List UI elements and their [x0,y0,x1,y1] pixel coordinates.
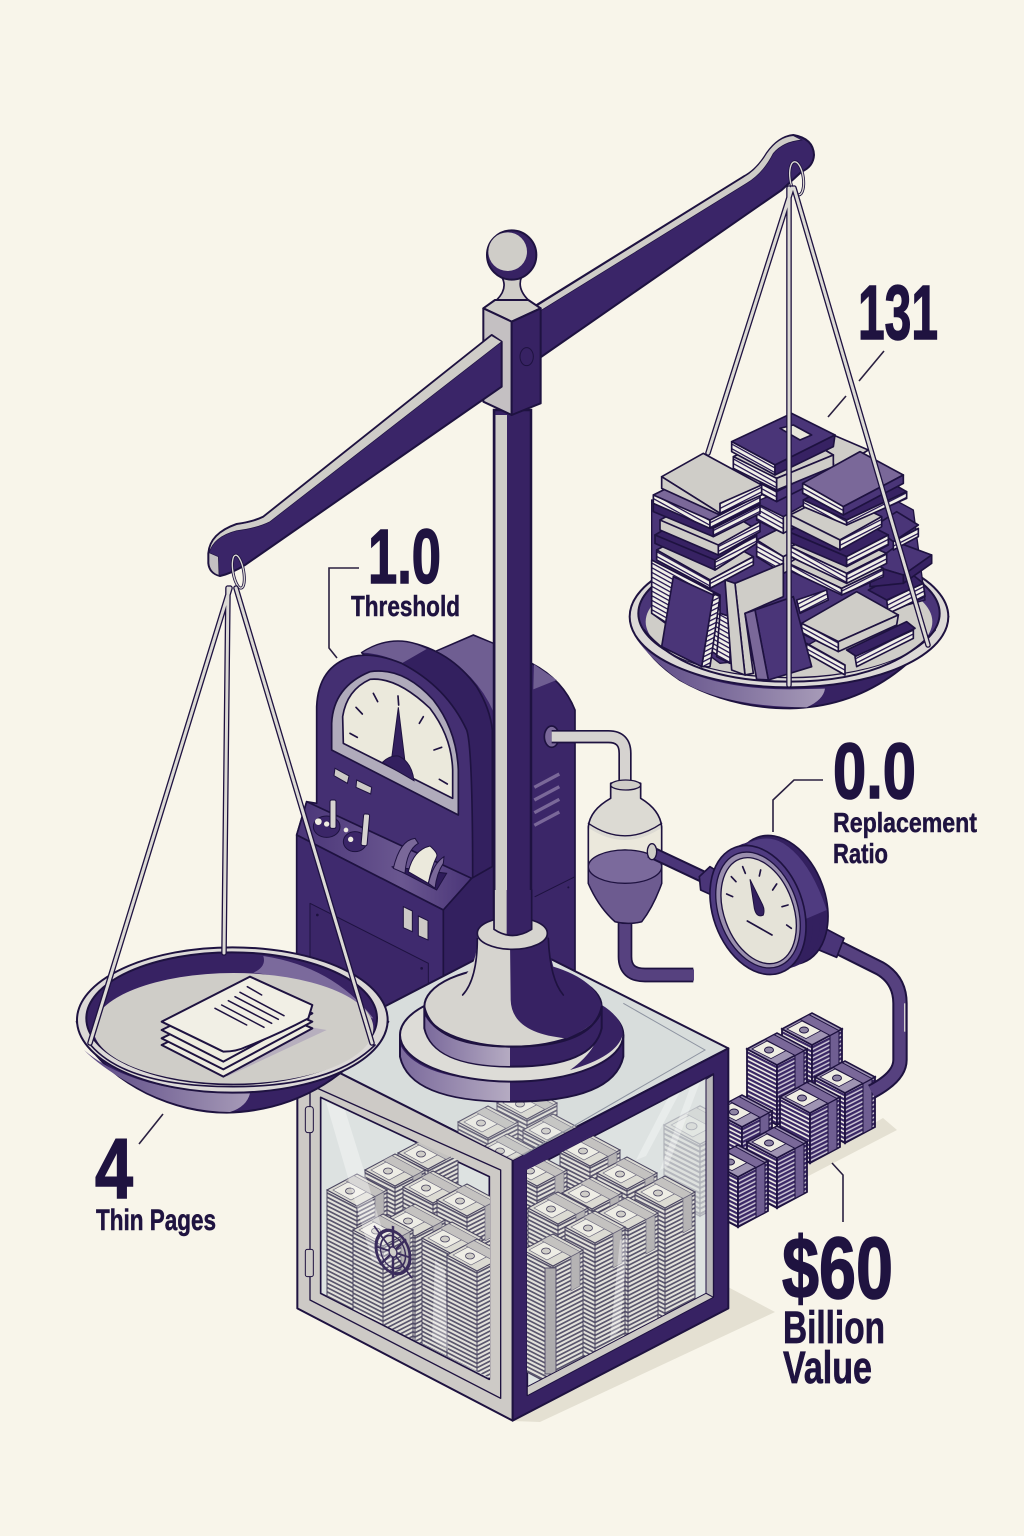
right beam arm [537,135,814,360]
left rim [77,947,388,1093]
gauge ticks [727,867,791,935]
book pile backing [652,467,925,663]
meter machine [297,635,575,1030]
ball [487,230,536,280]
door rivets [316,886,569,970]
right inner frame band [706,1075,713,1297]
upper hinge [305,1107,313,1133]
ball highlight [488,232,527,271]
outlet knob [544,726,559,747]
beam body [537,135,814,360]
base flare shadow dark [510,937,602,1038]
top edge band [523,1003,705,1155]
left beam top strip [209,336,502,553]
stat: 0.0 Replacement Ratio: Replacement [833,807,977,838]
gauge outlet pipe fill [830,943,900,1092]
flask neck ring [611,780,641,790]
arch side rim [362,641,492,963]
upper pipe outline [552,737,625,792]
left beam body [208,335,502,576]
money seen through top [457,1100,578,1160]
cast shadows under cube and money [513,1118,897,1422]
lower disc rim light side [401,1047,510,1101]
pan bowl [630,617,948,708]
paper stack [162,977,312,1077]
flask lower glass [589,828,661,867]
scale base on vault [400,890,623,1102]
gauge drum highlight [747,838,827,920]
flask liquid [588,850,662,923]
upper disc rim [424,1007,602,1067]
pan chains left [90,588,372,1043]
glass reflections [326,1082,700,1350]
dial frame [332,671,458,815]
lower disc rim [400,1035,623,1102]
stat: $60 Billion Value: Billion [783,1302,885,1353]
ball neck [497,277,528,300]
left pan paper shadow [227,1027,327,1077]
money stacks beside vault [708,1013,875,1227]
console lower front [297,835,443,1030]
lower hinge [305,1249,313,1277]
head top [483,300,541,322]
stat: 4 Thin Pages: Thin Pages [96,1204,216,1237]
upper disc front outline [424,1007,602,1047]
shaft bottom outline [494,890,532,935]
console top [297,802,472,910]
outlet connector [812,927,844,957]
flare left line [463,938,477,995]
stat: 4 Thin Pages: 4 [95,1122,133,1217]
left frame outline [310,1085,501,1398]
gauge bezel [693,832,823,988]
far right books [807,435,932,613]
toggle switches [313,800,370,852]
column head, ball and left beam [208,230,541,589]
left ring [230,554,246,589]
stat: 131: 131 [858,270,938,356]
left face frame [297,1052,513,1421]
pan chains right [708,188,928,685]
head left face [483,308,512,415]
gauge needle [750,879,764,916]
left beam end facet [209,553,219,575]
lower disc dark crescent [570,993,623,1070]
paper roll slot [392,838,447,890]
rear block [435,635,575,980]
upright gray book [725,563,783,675]
dial window [343,679,453,798]
right face frame [513,1048,728,1421]
stat: 0.0 Replacement Ratio [833,726,977,869]
console small windows [403,907,428,940]
shaft bottom fill [494,890,532,935]
stat: $60 Billion Value: Value [783,1342,872,1393]
money stacks right pane [527,1105,706,1380]
access door [310,903,428,1030]
console lower side [443,865,495,1030]
side vents [534,774,559,825]
right ring highlight [788,161,806,196]
pipe highlight [903,1003,907,1032]
central column shaft [494,410,531,935]
gauge face [707,847,810,974]
pan rim [630,546,948,687]
stat: 0.0 Replacement Ratio: 0.0 [833,726,916,815]
flat front books [802,592,915,675]
left ring highlight [230,554,246,589]
left inner wall light side [253,956,373,1018]
money stacks left pane [326,1142,490,1378]
arch front face [297,655,473,910]
right glass pane [527,1074,713,1395]
left pan rim front arc [91,1045,375,1087]
stat: 1.0 Threshold: 1.0 [368,514,441,600]
stat: 0.0 Replacement Ratio: Ratio [833,838,888,869]
left glass pane [321,1097,489,1379]
inlet connector [699,867,723,895]
upper pipe [552,737,625,792]
flask liquid surface [588,850,662,883]
pan floor [646,566,932,677]
upper disc rim light side [425,1017,510,1066]
front purple book [745,597,812,680]
paper text lines [215,987,284,1027]
head right face [512,308,541,415]
cube body [297,940,728,1421]
left pan with papers [77,947,388,1113]
vault wheel [374,1220,412,1284]
base flare left [430,933,513,1013]
gauge outlet pipe [830,943,900,1092]
book piles [652,413,932,680]
drain pipe outline [625,920,693,975]
flask body [588,781,662,923]
dial ticks [350,693,447,784]
gauge inlet pipe [650,852,710,880]
pan rim front arc [644,630,935,682]
pipes, flask and pressure gauge [552,737,905,1092]
upper disc top [424,967,602,1047]
stat: 1.0 Threshold [351,514,460,623]
stat: 4 Thin Pages [95,1122,216,1237]
dial needle and hub [382,707,414,781]
beam top strip [537,136,802,313]
left column [652,453,762,657]
lower pile behind front books [797,590,828,613]
glass vault cube [297,940,736,1421]
left inner wall [86,952,377,1084]
frame details [305,1003,713,1398]
inlet fitting [647,844,657,860]
pan bowl light side [636,638,825,707]
shaft bottom highlight [495,890,507,937]
gauge inlet pipe outline [650,852,710,880]
pan inner wall [638,549,940,677]
right pan with books [630,413,948,708]
stat: $60 Billion Value [782,1220,893,1393]
drain pipe [625,920,694,975]
gauge drum [700,822,845,985]
indicator lamps [334,768,372,794]
leaning purple book [662,577,720,667]
right lower frame band [527,1293,713,1396]
leader lines [139,351,884,1222]
right ring [788,161,806,196]
left bowl light side [84,1050,250,1112]
top glass face [297,940,728,1160]
rear seam [535,877,575,897]
stat: 1.0 Threshold: Threshold [351,591,460,623]
collar [477,917,547,949]
right column lower [788,452,907,595]
center column [732,413,835,573]
left floor [93,973,373,1084]
flask shoulder line [588,823,662,836]
stat: $60 Billion Value: $60 [782,1220,893,1317]
gauge face rim [701,840,815,980]
left bowl [77,1022,388,1113]
head pin [520,348,533,366]
flare right line [548,938,563,995]
lower disc top [400,988,623,1082]
